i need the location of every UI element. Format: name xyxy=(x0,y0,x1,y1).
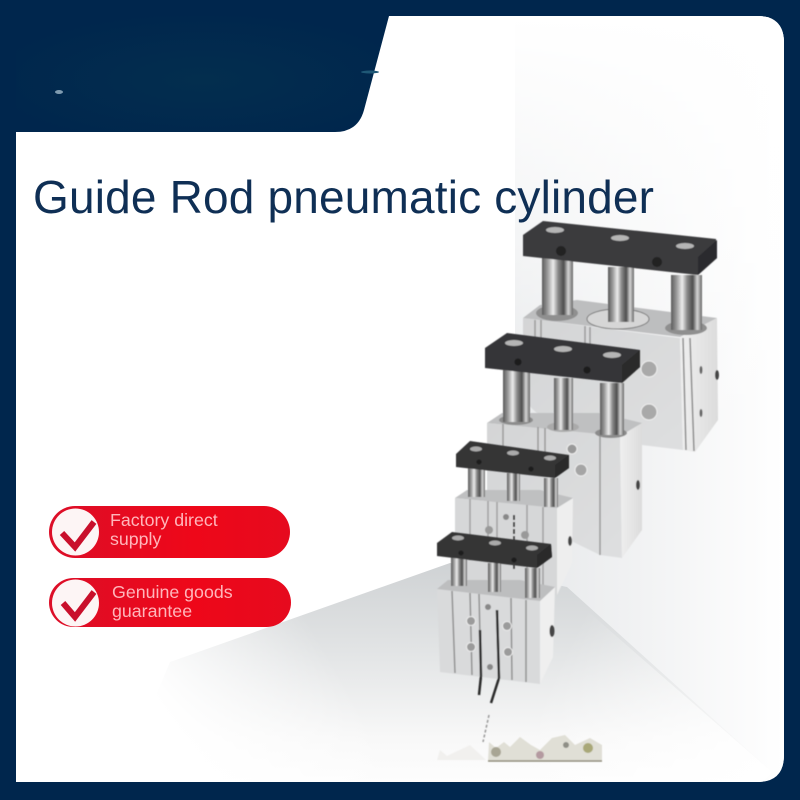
badge: genuine goods guarantee xyxy=(49,578,291,627)
navy header tab xyxy=(16,16,389,132)
cylinder 3 xyxy=(455,441,573,595)
badge text: supply xyxy=(110,529,162,549)
badge: factory direct supply xyxy=(49,506,290,558)
cylinder 2 xyxy=(485,333,642,558)
debris at foot of image xyxy=(437,735,602,761)
title: Guide Rod pneumatic cylinder xyxy=(33,171,654,223)
cylinder 4: smallest, front xyxy=(437,532,555,742)
backdrop: floor xyxy=(110,540,772,782)
cables xyxy=(479,610,499,742)
backdrop: grey wall xyxy=(515,16,784,782)
icon: check mark xyxy=(52,508,99,556)
badge text: guarantee xyxy=(112,601,192,621)
icon: check mark xyxy=(52,580,99,626)
cylinder 1: largest xyxy=(523,221,719,452)
badge text: Factory direct xyxy=(110,510,218,530)
badge text: Genuine goods xyxy=(112,582,233,602)
